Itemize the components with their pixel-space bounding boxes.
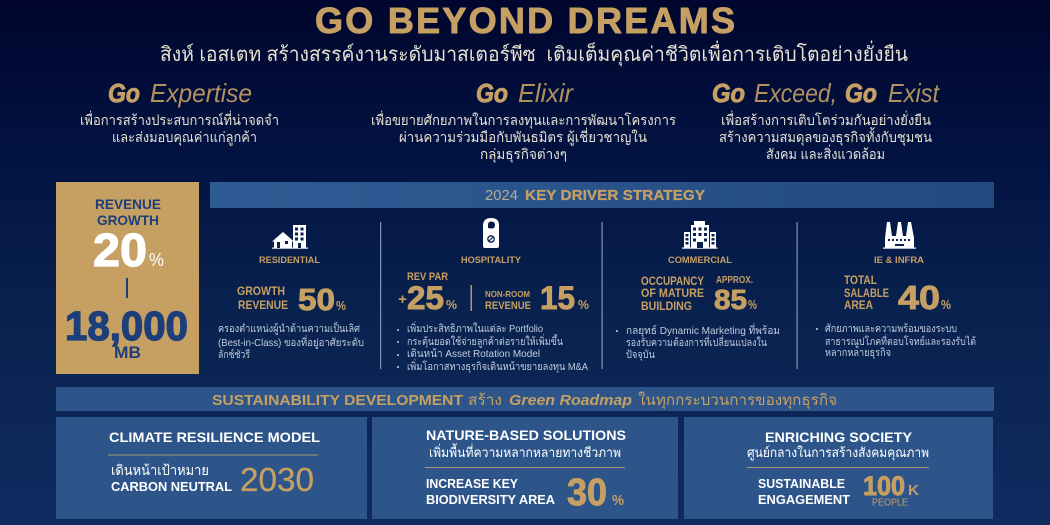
sustainability heading band: SUSTAINABILITY DEVELOPMENT (212, 393, 463, 409)
pillar: Go Expertise: เพื่อการสร้างประสบการณ์ที่น่าจดจำ (80, 111, 279, 128)
column: hospitality: 25 (407, 280, 444, 316)
pillar: Go Expertise: Go (108, 78, 140, 108)
panel: enriching society: ENGAGEMENT (758, 492, 850, 507)
column: commercial: 85 (714, 284, 747, 315)
column: residential: ครองตำแหน่งผู้นำด้านความเป็นเลิศ (218, 321, 360, 335)
panel: climate resilience model: CARBON NEUTRAL (111, 479, 232, 494)
column: hospitality: REV PAR (407, 271, 448, 283)
column: hospitality (397, 218, 589, 373)
panel: revenue growth: 18,000 (65, 303, 188, 349)
column: hospitality: % (446, 297, 457, 312)
pillar: Go Exceed, Go Exist: เพื่อสร้างการเติบโตร่วมกันอย่างยั่งยืน (721, 111, 931, 128)
pillar: Go Expertise: Expertise (150, 78, 252, 108)
sustainability heading band (56, 387, 994, 411)
column: hospitality: เดินหน้า Asset Rotation Model (407, 348, 540, 360)
pillar: Go Exceed, Go Exist (712, 78, 941, 162)
column: hospitality: REVENUE (485, 300, 531, 312)
panel: enriching society: K (908, 482, 919, 499)
panel: nature-based solutions: NATURE-BASED SOLUTIONS (426, 427, 626, 443)
column: residential: 50 (298, 282, 335, 317)
pillar: Go Elixir: กลุ่มธุรกิจต่างๆ (480, 146, 567, 163)
column: IE and infra: หลากหลายธุรกิจ (825, 347, 891, 359)
column: residential (218, 225, 364, 361)
panel: revenue growth: REVENUE (95, 196, 161, 212)
column: hospitality: + (398, 291, 407, 308)
column: commercial: OF MATURE (641, 288, 704, 300)
panel: enriching society: PEOPLE (872, 498, 908, 508)
pillar: Go Exceed, Go Exist: สร้างความสมดุลของธุรกิจทั้งกับชุมชน (719, 127, 932, 146)
column: IE and infra: ศักยภาพและความพร้อมของระบบ (825, 323, 957, 335)
panel: climate resilience model: เดินหน้าเป้าหมาย (111, 462, 209, 478)
pillar: Go Expertise: และส่งมอบคุณค่าแก่ลูกค้า (112, 129, 257, 146)
subtitle: สิงห์ เอสเตท สร้างสรรค์งานระดับมาสเตอร์พีซ เติมเต็มคุณค่าชีวิตเพื่อการเติบโตอย่างยั่งยืน (160, 40, 908, 67)
panel: revenue growth (56, 182, 199, 374)
column: IE and infra: % (941, 297, 951, 312)
sustainability heading band: สร้าง (468, 392, 502, 409)
panel: nature-based solutions (372, 417, 678, 519)
column: residential: REVENUE (238, 298, 288, 312)
panel: climate resilience model (56, 417, 367, 519)
column: hospitality: เพิ่มโอกาสทางธุรกิจเดินหน้าขยายลงทุน M&A (407, 359, 588, 373)
column: commercial: APPROX. (716, 275, 753, 286)
pillar: Go Elixir: ผ่านความร่วมมือกับพันธมิตร ผู้เชี่ยวชาญใน (399, 128, 647, 146)
pillar: Go Elixir: เพื่อขยายศักยภาพในการลงทุนและการพัฒนาโครงการ (371, 111, 676, 129)
column: residential: ลักซ์ชัวรี (218, 348, 250, 361)
panel: climate resilience model: CLIMATE RESILIENCE MODEL (109, 429, 320, 445)
column: IE and infra: AREA (844, 298, 873, 312)
column: residential: (Best-in-Class) ของที่อยู่อาศัยระดับ (218, 335, 364, 349)
panel: revenue growth: GROWTH (97, 212, 159, 228)
column: commercial (616, 221, 780, 361)
panel: enriching society (684, 417, 993, 519)
panel: revenue growth: % (149, 250, 164, 270)
column: IE and infra (816, 222, 976, 359)
pillar: Go Elixir (371, 78, 676, 163)
pillar: Go Exceed, Go Exist: Go (845, 78, 877, 108)
column: hospitality: เพิ่มประสิทธิภาพในแต่ละ Portfolio (407, 321, 543, 335)
column: hospitality: 15 (540, 280, 575, 316)
column: residential: RESIDENTIAL (259, 255, 320, 266)
column: IE and infra: TOTAL (844, 273, 877, 287)
column: commercial: OCCUPANCY (641, 276, 704, 288)
title: GO BEYOND DREAMS (315, 0, 735, 41)
pillar: Go Exceed, Go Exist: สังคม และสิ่งแวดล้อม (766, 145, 885, 162)
column: residential: % (336, 298, 346, 313)
panel: nature-based solutions: % (612, 492, 624, 509)
pillar: Go Exceed, Go Exist: Exist (888, 78, 941, 108)
column: commercial: ปัจจุบัน (626, 349, 655, 361)
pillar: Go Exceed, Go Exist: Exceed, (754, 78, 837, 108)
icon: door hanger (483, 218, 499, 248)
column: commercial: กลยุทธ์ Dynamic Marketing ที่พร้อม (626, 323, 780, 337)
column: IE and infra: IE & INFRA (874, 255, 924, 266)
icon: factory (883, 222, 916, 249)
column: IE and infra: SALABLE (844, 286, 889, 300)
panel: nature-based solutions: 30 (567, 472, 607, 514)
icon: house and tower (272, 225, 308, 249)
column: commercial: % (748, 297, 757, 312)
column: commercial: COMMERCIAL (668, 255, 732, 266)
key driver heading band: 2024 (485, 187, 518, 204)
panel: enriching society: ENRICHING SOCIETY (765, 429, 913, 445)
column: commercial: BUILDING (641, 301, 692, 313)
column: IE and infra: 40 (898, 279, 940, 316)
panel: climate resilience model: 2030 (240, 461, 314, 498)
column: IE and infra: สาธารณูปโภคที่ตอบโจทย์และรองรับได้ (825, 334, 976, 348)
column: hospitality: % (578, 297, 589, 312)
key driver heading band: KEY DRIVER STRATEGY (525, 187, 705, 204)
column: commercial: รองรับความต้องการที่เปลี่ยนแปลงใน (626, 335, 767, 349)
pillar: Go Elixir: Go (476, 78, 508, 108)
column: hospitality: HOSPITALITY (461, 255, 522, 266)
panel: enriching society: ศูนย์กลางในการสร้างสังคมคุณภาพ (747, 445, 929, 461)
pillar: Go Exceed, Go Exist: Go (712, 78, 745, 108)
panel: enriching society: 100 (863, 471, 905, 501)
column: hospitality: กระตุ้นยอดใช้จ่ายลูกค้าต่อรายให้เพิ่มขึ้น (407, 334, 563, 348)
pillar: Go Elixir: Elixir (518, 78, 574, 108)
key driver heading band (210, 182, 994, 208)
pillar: Go Expertise (80, 78, 279, 146)
panel: revenue growth: 20 (93, 224, 147, 276)
sustainability heading band: Green Roadmap (509, 393, 632, 409)
column: hospitality: NON-ROOM (485, 289, 530, 299)
panel: nature-based solutions: INCREASE KEY (426, 476, 518, 491)
panel: enriching society: SUSTAINABLE (758, 476, 845, 491)
panel: nature-based solutions: BIODIVERSITY AREA (426, 492, 556, 507)
icon: office buildings (682, 221, 718, 249)
panel: revenue growth: MB (114, 343, 141, 362)
column: residential: GROWTH (237, 284, 285, 298)
sustainability heading band: ในทุกกระบวนการของทุกธุรกิจ (638, 391, 837, 410)
panel: nature-based solutions: เพิ่มพื้นที่ความหลากหลายทางชีวภาพ (429, 443, 621, 460)
